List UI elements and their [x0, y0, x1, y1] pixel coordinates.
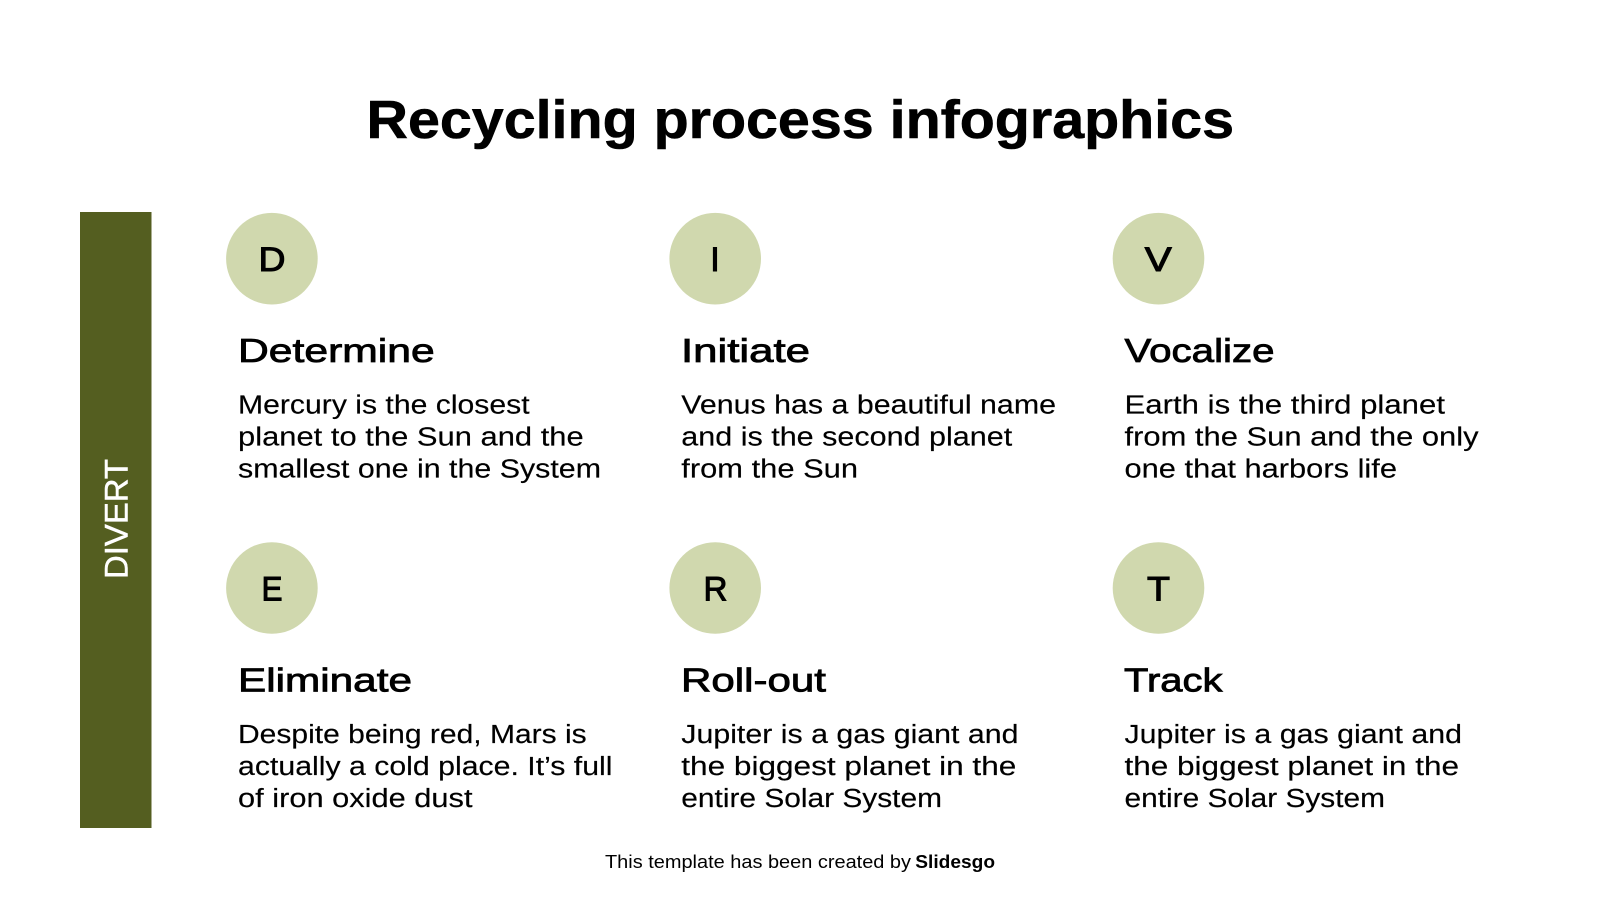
text block: Initiate description [681, 392, 1056, 484]
panel: Track [1113, 542, 1462, 813]
heading: Eliminate: Eliminate [238, 662, 412, 700]
text block: Determine description: Mercury is the closest [238, 392, 530, 420]
text block: Initiate description: and is the second planet [681, 424, 1012, 452]
icon: letter I badge: I [710, 241, 720, 279]
text block: Vocalize description: one that harbors life [1124, 456, 1397, 484]
heading: Initiate: Initiate [681, 333, 810, 370]
footer credit: This template has been created by [605, 852, 911, 872]
heading: Roll-out: Roll-out [681, 662, 827, 700]
text block: Initiate description: Venus has a beautiful name [681, 392, 1056, 420]
heading: Vocalize: Vocalize [1124, 333, 1274, 370]
panel: Vocalize [1113, 213, 1479, 483]
title: Recycling process infographics [366, 90, 1234, 150]
text block: Determine description: planet to the Sun and the [238, 424, 584, 452]
icon: letter D badge: D [258, 241, 286, 279]
text block: Roll-out description: the biggest planet in the [681, 753, 1016, 781]
icon: letter R badge [669, 542, 761, 634]
text block: Eliminate description: actually a cold place. It’s full [238, 753, 612, 781]
text block: Roll-out description: entire Solar System [681, 785, 942, 813]
icon: letter I badge [669, 213, 761, 304]
text block: Vocalize description: Earth is the third planet [1124, 392, 1445, 420]
icon: letter R badge: R [704, 570, 728, 608]
panel: Eliminate [226, 542, 613, 813]
text block: Vocalize description [1124, 392, 1479, 484]
text block: Track description: entire Solar System [1124, 785, 1385, 813]
footer credit: Slidesgo [915, 852, 995, 872]
heading: Track: Track [1124, 662, 1223, 700]
panel: Roll-out [669, 542, 1018, 813]
panel: Determine [226, 213, 601, 483]
text block: Roll-out description: Jupiter is a gas giant and [681, 721, 1018, 749]
icon: letter T badge: T [1147, 570, 1170, 608]
text block: Track description: Jupiter is a gas giant and [1124, 721, 1462, 749]
icon: letter E badge [226, 542, 318, 634]
text block: Track description [1124, 721, 1462, 813]
text block: Determine description: smallest one in the System [238, 456, 601, 484]
text block: Initiate description: from the Sun [681, 456, 858, 484]
icon: letter E badge: E [262, 570, 282, 608]
icon: letter D badge [226, 213, 318, 304]
text block: Roll-out description [681, 721, 1018, 813]
text block: Determine description [238, 392, 601, 484]
heading: Determine: Determine [238, 333, 435, 370]
icon: letter V badge: V [1145, 241, 1172, 279]
text block: Eliminate description: Despite being red, Mars is [238, 721, 587, 749]
text block: Eliminate description: of iron oxide dust [238, 785, 472, 813]
panel: Initiate [669, 213, 1056, 483]
vertical banner: DIVERT [80, 212, 152, 828]
text block: Track description: the biggest planet in the [1124, 753, 1459, 781]
vertical banner: DIVERT: DIVERT [98, 459, 134, 579]
text block: Eliminate description [238, 721, 612, 813]
icon: letter T badge [1113, 542, 1204, 634]
text block: Vocalize description: from the Sun and the only [1124, 424, 1479, 452]
icon: letter V badge [1113, 213, 1204, 304]
